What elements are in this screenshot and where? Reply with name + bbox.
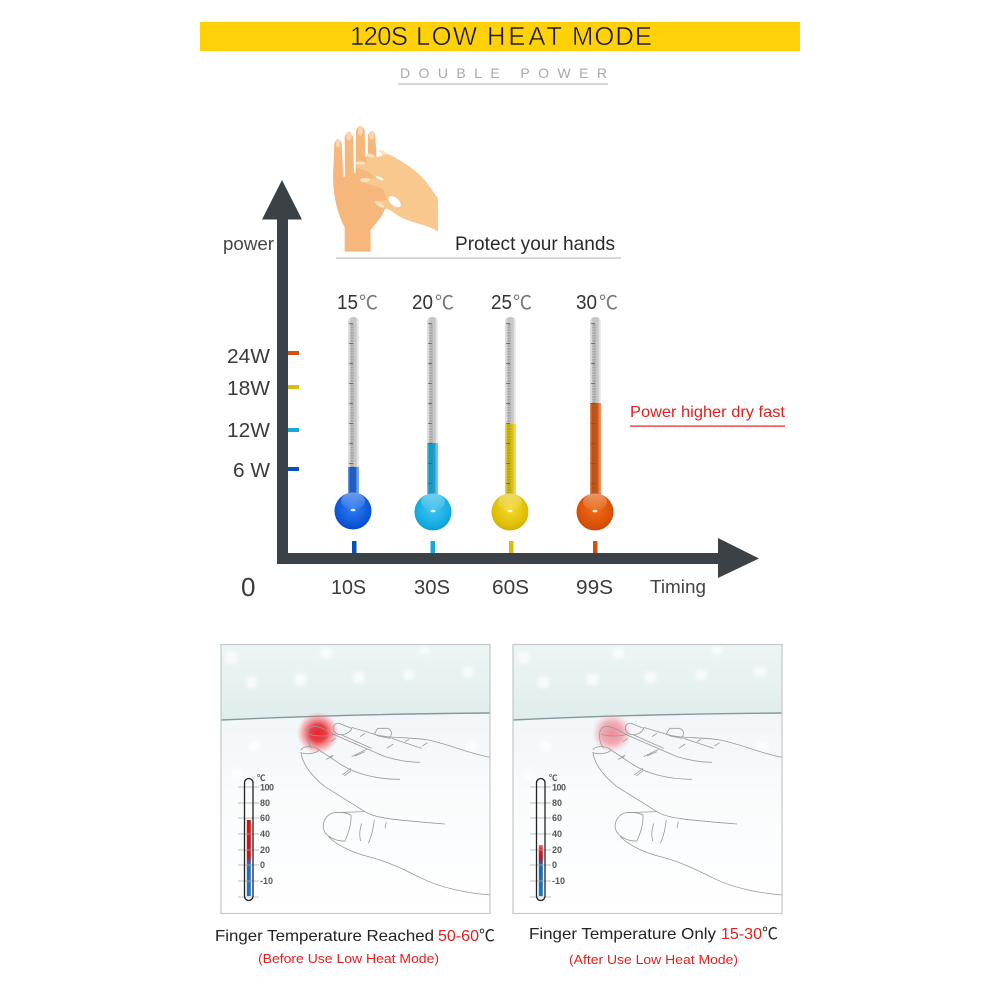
icon: hands [333, 126, 438, 252]
power scale labels and ticks [227, 346, 299, 482]
power scale labels and ticks: 24W [227, 346, 270, 368]
temperature gauge: 60 [552, 813, 562, 823]
temperature gauge: -10 [260, 876, 273, 886]
temperature gauge: ℃ [549, 773, 558, 783]
temperature gauge: ℃ [257, 773, 266, 783]
temperature gauge: 100 [260, 782, 274, 792]
title banner: 120S [350, 23, 408, 51]
panel: after low heat mode [513, 644, 782, 914]
thermometer: 15 degrees, 10S: 15 [337, 292, 358, 314]
temperature gauge: -10 [552, 876, 565, 886]
caption: before low heat mode: 50-60 [438, 928, 479, 945]
thermometer: 30 degrees, 99S: 99S [576, 577, 613, 599]
caption: before low heat mode: ℃ [479, 928, 495, 945]
caption: after low heat mode [529, 926, 778, 967]
panel border [221, 644, 490, 914]
temperature gauge: 0 [260, 860, 265, 870]
temperature gauge: 20 [552, 845, 562, 855]
panel border [513, 644, 782, 914]
thermometer: 15 degrees, 10S: ℃ [359, 293, 378, 314]
red heat spot [592, 713, 632, 753]
thermometer: 25 degrees, 60S [491, 292, 532, 599]
red heat spot [297, 712, 339, 754]
caption: after low heat mode: Finger Temperature Only [529, 926, 716, 943]
caption: before low heat mode: (Before Use Low Heat Mode) [258, 951, 439, 966]
title banner [200, 22, 800, 51]
temperature gauge: 80 [552, 798, 562, 808]
power scale labels and ticks: 18W [227, 378, 270, 400]
caption: after low heat mode: 15-30 [721, 926, 762, 943]
thermometer: 20 degrees, 30S [412, 292, 454, 599]
thermometer: 20 degrees, 30S: ℃ [435, 293, 454, 314]
thermometer: 15 degrees, 10S [331, 292, 378, 599]
axis label: power: power [223, 234, 274, 254]
chart axes [262, 180, 759, 578]
thermometer: 20 degrees, 30S: 30S [414, 577, 450, 599]
axis origin label: 0 [241, 572, 255, 602]
axis label: timing: Timing [650, 577, 706, 597]
hand outline [593, 723, 782, 895]
vertical axis arrow [262, 180, 302, 564]
subtitle: DOUBLE POWER [400, 65, 607, 81]
power scale labels and ticks: 6 W [233, 460, 270, 482]
caption: after low heat mode: ℃ [762, 926, 778, 943]
temperature gauge [238, 773, 274, 900]
title banner: HEAT [487, 23, 562, 51]
thermometer: 30 degrees, 99S [576, 292, 618, 599]
thermometer: 25 degrees, 60S: 25 [491, 292, 512, 314]
panel: before low heat mode [221, 644, 490, 914]
temperature gauge: 0 [552, 860, 557, 870]
thermometer: 25 degrees, 60S: ℃ [513, 293, 532, 314]
temperature gauge: 100 [552, 782, 566, 792]
hand outline [301, 723, 490, 895]
temperature gauge: 40 [552, 829, 562, 839]
title banner: LOW [416, 23, 478, 51]
temperature gauge: 20 [260, 845, 270, 855]
temperature gauge: 80 [260, 798, 270, 808]
temperature gauge: 60 [260, 813, 270, 823]
caption: before low heat mode: Finger Temperature Reached [215, 928, 434, 945]
temperature gauge [530, 773, 566, 900]
thermometer: 20 degrees, 30S: 20 [412, 292, 433, 314]
power scale labels and ticks: 12W [227, 420, 270, 442]
temperature gauge: 40 [260, 829, 270, 839]
callout: power higher dry fast: Power higher dry fast [630, 404, 786, 421]
thermometer: 30 degrees, 99S: ℃ [599, 293, 618, 314]
title banner: MODE [572, 23, 652, 51]
thermometer: 30 degrees, 99S: 30 [576, 292, 597, 314]
horizontal axis arrow [277, 538, 759, 578]
caption: before low heat mode [215, 928, 495, 966]
heading: protect your hands: Protect your hands [455, 233, 615, 255]
caption: after low heat mode: (After Use Low Heat Mode) [569, 952, 738, 967]
thermometer: 25 degrees, 60S: 60S [492, 577, 529, 599]
thermometer: 15 degrees, 10S: 10S [331, 577, 366, 599]
